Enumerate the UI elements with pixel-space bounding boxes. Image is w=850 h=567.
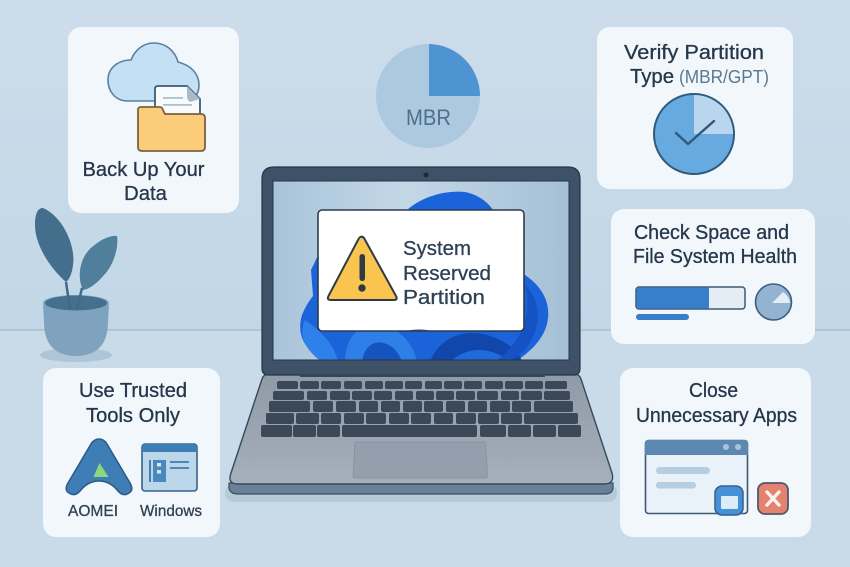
storage bar — [636, 287, 745, 320]
heading: Verify Partition — [624, 41, 764, 64]
icon: pie clock with check — [654, 94, 734, 174]
icon: Windows window — [142, 444, 197, 491]
heading: Close — [689, 379, 738, 402]
heading — [624, 41, 769, 88]
icon: disk health — [756, 284, 792, 320]
laptop — [225, 167, 617, 502]
dialog text: Reserved — [403, 262, 491, 285]
keyboard — [261, 381, 581, 437]
label: Windows: Windows — [140, 503, 202, 520]
icon: close button — [758, 483, 788, 514]
dialog text: Partition — [403, 286, 485, 309]
heading — [79, 379, 187, 427]
heading: Tools Only — [86, 404, 181, 427]
panel: use trusted tools only — [43, 368, 220, 537]
plant — [35, 208, 117, 362]
screen wallpaper — [273, 181, 569, 362]
heading: Unnecessary Apps — [636, 404, 797, 427]
label: AOMEI: AOMEI — [68, 503, 118, 520]
heading: Data — [124, 182, 168, 205]
pie chart: MBR: MBR — [406, 105, 451, 130]
alert dialog — [318, 210, 524, 331]
laptop lid — [262, 167, 580, 375]
icon: AOMEI logo — [66, 439, 132, 495]
heading: Back Up Your — [82, 158, 205, 181]
dialog text: System — [403, 237, 471, 260]
background wall — [0, 0, 850, 330]
heading — [82, 158, 205, 205]
heading — [636, 379, 797, 427]
pie chart: MBR — [376, 44, 480, 148]
heading: Type — [630, 65, 674, 88]
laptop shadow — [225, 484, 617, 502]
heading: File System Health — [633, 245, 797, 268]
heading: (MBR/GPT) — [679, 66, 769, 87]
heading — [633, 221, 797, 268]
icon: warning triangle — [328, 237, 397, 300]
heading: Use Trusted — [79, 379, 187, 402]
panel: verify partition type — [597, 27, 793, 189]
laptop base — [229, 374, 613, 494]
dialog text — [403, 237, 491, 309]
desk surface — [0, 330, 850, 567]
panel: check space and file system health — [611, 209, 815, 344]
panel: close unnecessary apps — [620, 368, 811, 537]
panel: back up your data — [68, 27, 239, 213]
heading: Check Space and — [634, 221, 789, 244]
icon: cloud with folder — [108, 43, 205, 151]
icon: app window — [645, 440, 748, 515]
